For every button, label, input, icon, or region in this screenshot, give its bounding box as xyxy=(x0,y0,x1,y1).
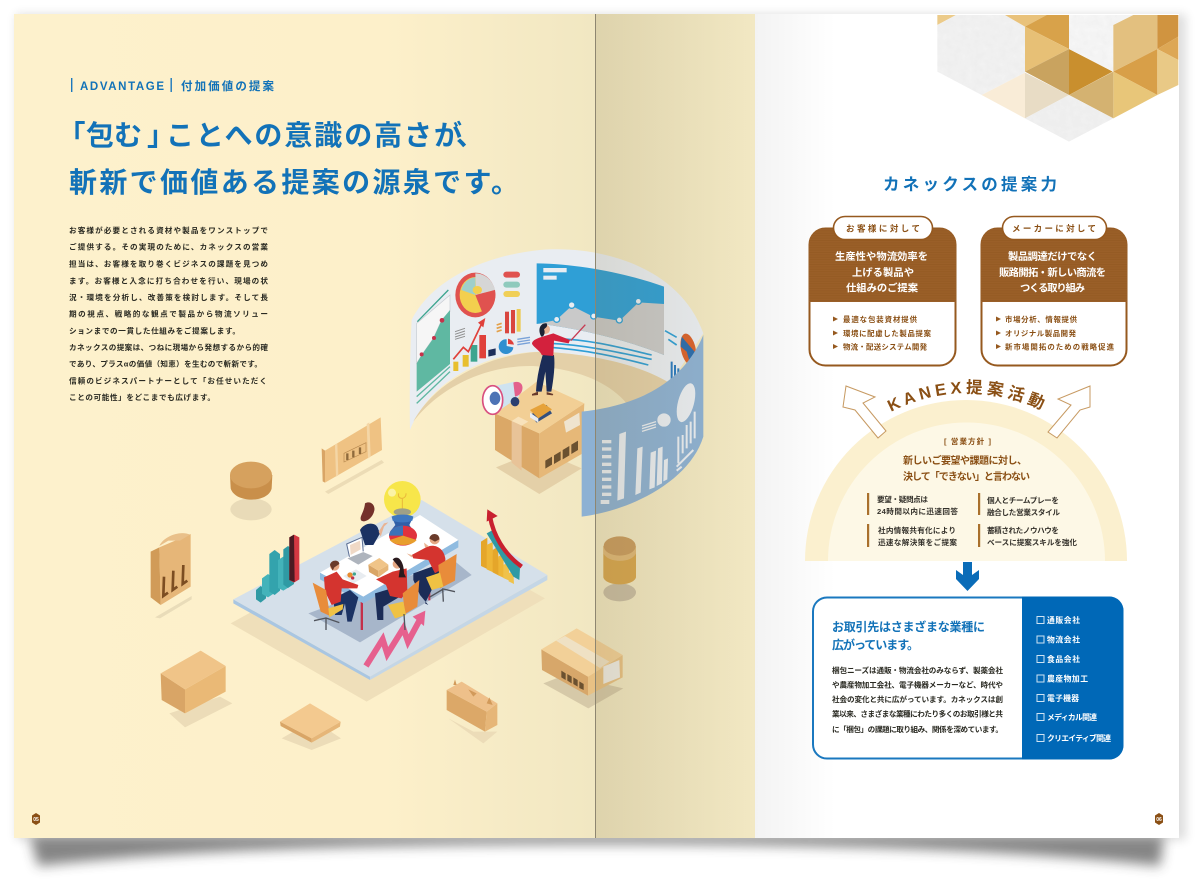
heading: カネックスの提案力: カネックスの提案力 xyxy=(883,175,1057,194)
main title: 斬新で価値ある提案の源泉です。 xyxy=(69,167,519,198)
panel heading: 広がっています。 xyxy=(832,637,919,652)
panel body text: や農産物加工会社、電子機器メーカーなど、時代や xyxy=(832,680,1003,690)
header text: つくる取り組み xyxy=(1020,282,1085,294)
point: team play: 個人とチームプレーを xyxy=(987,495,1059,505)
panel: clients xyxy=(813,596,1124,760)
header text xyxy=(835,250,928,294)
box top-left: flat mailer xyxy=(322,417,384,494)
blue list column xyxy=(1022,596,1124,760)
arrow up-right xyxy=(1048,386,1090,438)
body text: ションまでの一貫した仕組みをご提案します。 xyxy=(69,325,240,335)
header text: 販路開拓・新しい商流を xyxy=(999,266,1106,279)
card header band xyxy=(809,228,956,302)
floor shadow of screen xyxy=(413,352,670,422)
card body xyxy=(982,228,1126,366)
arrow: down xyxy=(956,562,979,591)
outer arch xyxy=(805,400,1127,561)
body text xyxy=(69,225,268,402)
paper bag with bars xyxy=(151,533,192,618)
policy statement: 決して「できない」と言わない xyxy=(903,470,1030,483)
main title xyxy=(58,119,519,198)
man right xyxy=(407,534,445,605)
header text: 上げる製品や xyxy=(852,266,914,279)
header text: 生産性や物流効率を xyxy=(835,250,928,263)
pill label xyxy=(834,216,932,240)
panel heading xyxy=(832,619,985,652)
pill label xyxy=(1002,216,1106,240)
bullet list xyxy=(996,315,1115,352)
main title: 、 xyxy=(456,120,484,151)
woman far side xyxy=(360,502,388,545)
line chart panel xyxy=(537,263,664,365)
main title: 「 xyxy=(58,120,86,151)
panel body text: に「梱包」の課題に取り組み、関係を深めています。 xyxy=(832,724,1003,734)
bullet list: 物流・配送システム開発 xyxy=(843,342,928,352)
checklist: 食品会社 xyxy=(1047,654,1080,664)
panel body text xyxy=(832,665,1003,734)
main title: 」 xyxy=(147,120,175,151)
checklist: 電子機器 xyxy=(1047,693,1079,703)
semicircle: KANEX activity xyxy=(805,379,1127,561)
pill label: メーカーに対して xyxy=(1012,224,1096,234)
teal area chart xyxy=(417,290,450,403)
checklist: クリエイティブ関連 xyxy=(1047,733,1111,743)
panel body text: 社会の変化と共に広がっています。カネックスは創 xyxy=(832,694,1003,704)
policy statement xyxy=(903,454,1030,483)
bar chart with arrow xyxy=(453,309,530,371)
body text: であり、プラスαの価値（知恵）を生むので斬新です。 xyxy=(69,359,262,369)
panel body text: 梱包ニーズは通販・物流会社のみならず、製薬会社 xyxy=(832,665,1003,675)
point: 24h reply: 要望・疑問点は xyxy=(877,494,928,504)
back screen band xyxy=(410,249,703,430)
teal bar chart xyxy=(256,535,299,603)
cylinder tin xyxy=(230,462,272,520)
point: know-how: 蓄積されたノウハウを xyxy=(987,525,1059,535)
page number right xyxy=(1155,813,1163,825)
floor shadow of table xyxy=(308,560,472,642)
cardboard box right xyxy=(541,628,623,708)
body text: 担当は、お客様を取り巻くビジネスの課題を見つめ xyxy=(69,258,268,268)
body text: ご提供する。その実現のために、カネックスの営業 xyxy=(69,242,268,252)
body text: お客様が必要とされる資材や製品をワンストップで xyxy=(69,225,268,235)
curved title: KANEX提案活動 xyxy=(887,379,1045,412)
carry box with handle xyxy=(447,679,497,743)
page number left xyxy=(32,813,40,825)
card body xyxy=(810,228,956,366)
man left xyxy=(324,561,358,622)
platform xyxy=(233,500,547,680)
pie chart xyxy=(455,273,495,317)
flat box bottom xyxy=(280,703,341,750)
bullet list: オリジナル製品開発 xyxy=(1005,329,1077,338)
point: know-how xyxy=(978,524,1077,547)
point: team play xyxy=(978,493,1060,517)
cardboard box bottom-left xyxy=(161,651,232,727)
bullet list: 市場分析、情報提供 xyxy=(1005,315,1078,324)
front translucent screen band xyxy=(582,335,703,517)
bullet list: 環境に配慮した製品提案 xyxy=(843,329,932,338)
body text: カネックスの提案は、つねに現場から発想するから的確 xyxy=(69,342,268,352)
bullet list: 新市場開拓のための戦略促進 xyxy=(1005,342,1115,352)
woman front xyxy=(375,558,407,620)
fold shading and crease xyxy=(595,14,755,838)
right side pie on screen xyxy=(665,331,699,380)
body text: 信頼のビジネスパートナーとして「お任せいただく xyxy=(69,376,267,386)
tabletop xyxy=(320,515,458,603)
body text: 期の視点、戦略的な観点で製品から物流ソリュー xyxy=(69,309,268,319)
table legs xyxy=(361,588,430,630)
illustration: team at table xyxy=(313,481,458,630)
inner arch xyxy=(828,422,1105,561)
panel frame xyxy=(813,598,1122,758)
header text: 製品調達だけでなく xyxy=(1008,250,1097,263)
bullet list xyxy=(833,315,932,352)
point: 24h reply xyxy=(867,493,958,516)
platform shadow xyxy=(231,590,545,702)
body text: ます。お客様と入念に打ち合わせを行い、現場の状 xyxy=(69,275,268,285)
main title: 包む xyxy=(86,120,142,151)
card: メーカーに対して xyxy=(981,216,1127,366)
section label: ADVANTAGE: 付加価値の提案 xyxy=(181,79,274,93)
card: お客様に対して xyxy=(809,216,956,366)
body text: 況・環境を分析し、改善策を検討します。そして長 xyxy=(69,292,268,302)
small box on table xyxy=(368,558,388,577)
panel body text: 業以来、さまざまな業種にわたり多くのお取引様と共 xyxy=(832,708,1003,718)
right page background xyxy=(755,14,1179,838)
cardboard box with shadow xyxy=(495,382,584,494)
point: team play: 融合した営業スタイル xyxy=(987,507,1060,517)
pill legend xyxy=(503,272,520,297)
illustration: meeting platform xyxy=(151,417,547,750)
point: know-how: ベースに提案スキルを強化 xyxy=(987,537,1077,547)
chair right xyxy=(426,554,457,602)
body text: ことの可能性」をどこまでも広げます。 xyxy=(69,392,215,402)
point: info sharing: 迅速な解決策をご提案 xyxy=(878,537,957,547)
color document on table xyxy=(343,569,367,583)
orange chart with red arrow xyxy=(481,509,522,584)
header text: 仕組みのご提案 xyxy=(846,282,919,294)
chair left xyxy=(313,583,343,630)
left page background xyxy=(14,14,755,838)
checklist: 物流会社 xyxy=(1047,634,1080,644)
panel heading: お取引先はさまざまな業種に xyxy=(832,619,985,634)
stack of books xyxy=(530,403,552,423)
pill label: お客様に対して xyxy=(846,224,920,234)
arrow up-left xyxy=(843,386,886,438)
illustration: circular data screen with presenter xyxy=(410,249,703,517)
page number left: 05 xyxy=(33,817,39,823)
section label: ADVANTAGE: ADVANTAGE xyxy=(80,81,164,93)
page number right: 06 xyxy=(1156,817,1162,823)
lightbulb and pie base xyxy=(384,481,421,546)
cylinder tin right xyxy=(603,536,636,601)
checklist: メディカル関連 xyxy=(1047,712,1097,722)
policy label: [ 営業方針 ] xyxy=(944,436,992,446)
hexagon pattern decoration xyxy=(937,15,1178,142)
checklist: 通販会社 xyxy=(1047,615,1080,625)
chair front xyxy=(388,580,419,630)
megaphone xyxy=(483,382,523,414)
section label: ADVANTAGE xyxy=(71,78,274,93)
point: 24h reply: 24時間以内に迅速回答 xyxy=(877,506,958,516)
bullet list: 最適な包装資材提供 xyxy=(843,315,918,324)
point: info sharing xyxy=(867,524,957,547)
point: info sharing: 社内情報共有化により xyxy=(878,525,956,535)
policy statement: 新しいご要望や課題に対し、 xyxy=(903,454,1027,467)
checklist xyxy=(1037,615,1111,743)
presenter woman xyxy=(532,323,585,396)
header text xyxy=(999,250,1106,294)
main title: ことへの意識の高さが xyxy=(166,119,462,151)
pink zigzag arrow xyxy=(366,611,425,666)
laptop xyxy=(347,537,373,565)
card header band xyxy=(981,228,1127,302)
checklist: 農産物加工 xyxy=(1047,674,1088,684)
